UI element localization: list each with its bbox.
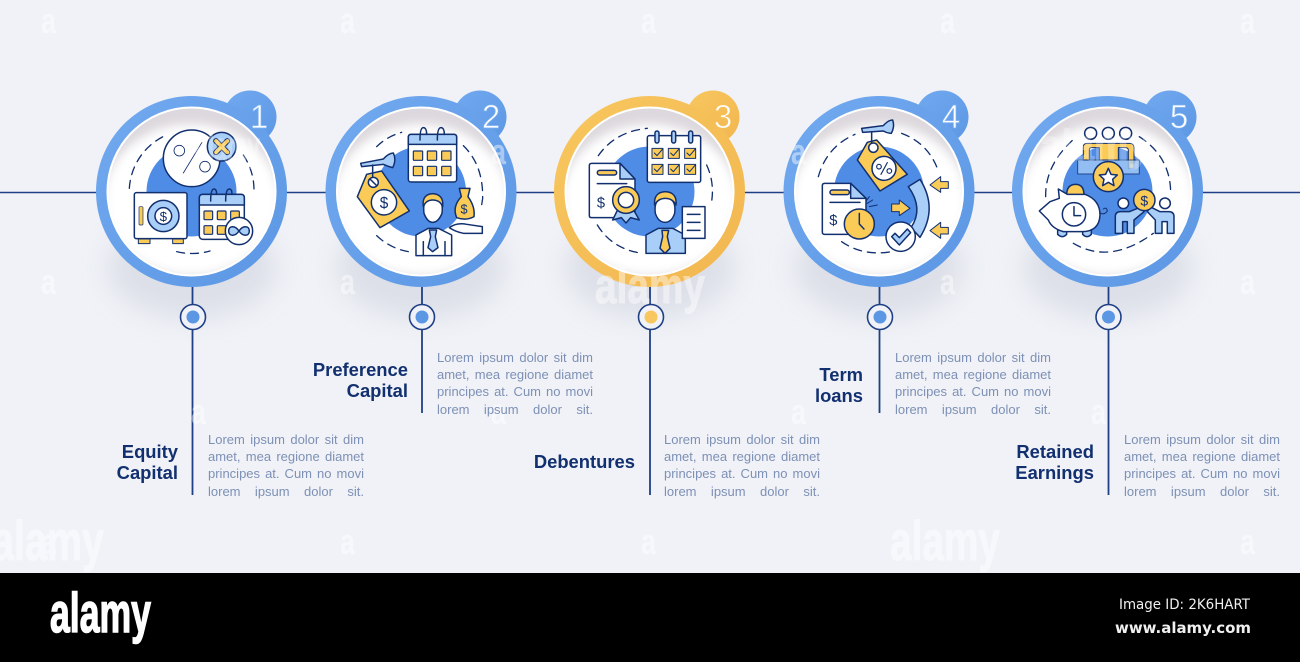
number 5: 5	[1170, 98, 1188, 135]
watermark overlay: a	[641, 521, 657, 562]
heading: equity capital: Equity	[122, 441, 179, 462]
number 4: 4	[942, 98, 960, 135]
heading: preference capital: Capital	[347, 380, 408, 401]
image id: Image ID: 2K6HART	[1119, 597, 1250, 613]
description 1	[208, 432, 364, 499]
watermark overlay: a	[1240, 261, 1256, 302]
heading: term loans: Term	[819, 364, 863, 385]
icon: certificate, calendar and bondholder: $	[597, 196, 605, 212]
icon: price tag, calendar and investor	[357, 128, 483, 256]
description 4: amet, mea regione diamet	[895, 367, 1051, 382]
watermark overlay: alamy	[890, 509, 1000, 572]
description 2	[437, 350, 593, 417]
connector and node 5	[1096, 287, 1121, 495]
circle frame 5	[1012, 90, 1203, 318]
circle frame 1	[96, 90, 287, 318]
description 4: lorem ipsum dolor sit.	[895, 402, 1051, 417]
watermark overlay: a	[340, 0, 356, 41]
description 2: principes at. Cum no movi	[437, 384, 593, 399]
footer logo: alamy	[50, 581, 151, 644]
connector and node 3	[638, 287, 664, 495]
icon: loan terms, clock and approval	[818, 120, 948, 253]
description 1: lorem ipsum dolor sit.	[208, 484, 364, 499]
description 3: lorem ipsum dolor sit.	[664, 484, 820, 499]
horizontal timeline line	[0, 192, 1300, 194]
watermark overlay: alamy	[195, 125, 260, 169]
icon: board, piggy bank and shared profit: $	[1140, 192, 1148, 208]
description 2: Lorem ipsum dolor sit dim	[437, 350, 593, 365]
icon: price tag, calendar and investor: $	[380, 195, 389, 212]
step 1: equity capital	[96, 90, 287, 495]
footer band	[0, 573, 1300, 662]
number 1: 1	[250, 98, 268, 135]
watermark overlay: a	[340, 261, 356, 302]
watermark overlay: a	[41, 0, 57, 41]
icon: interest, safe and calendar	[129, 130, 254, 253]
heading: equity capital: Capital	[117, 462, 178, 483]
circle frame 2	[326, 90, 516, 318]
watermark overlay: a	[1240, 0, 1256, 41]
step 3: debentures	[534, 90, 745, 495]
heading: retained earnings: Earnings	[1015, 462, 1094, 483]
watermark overlay: a	[940, 0, 956, 41]
description 5: lorem ipsum dolor sit.	[1124, 484, 1280, 499]
description 3: Lorem ipsum dolor sit dim	[664, 432, 820, 447]
number 2: 2	[482, 98, 500, 135]
icon: price tag, calendar and investor: $	[460, 203, 468, 217]
description 3: amet, mea regione diamet	[664, 449, 820, 464]
watermark overlay: a	[791, 391, 807, 432]
watermark overlay: a	[1091, 391, 1107, 432]
icon: interest, safe and calendar: $	[160, 209, 168, 224]
watermark overlay: a	[491, 391, 507, 432]
watermark overlay: a	[340, 521, 356, 562]
description 2: lorem ipsum dolor sit.	[437, 402, 593, 417]
icon: loan terms, clock and approval: $	[829, 213, 837, 229]
step 5: retained earnings	[1012, 90, 1203, 495]
heading: preference capital: Preference	[313, 359, 408, 380]
circle frame 4	[784, 90, 974, 318]
watermark overlay: a	[41, 261, 57, 302]
step 2: preference capital	[313, 90, 516, 413]
description 1: principes at. Cum no movi	[208, 466, 364, 481]
description 4: principes at. Cum no movi	[895, 384, 1051, 399]
description 1: Lorem ipsum dolor sit dim	[208, 432, 364, 447]
step 4: term loans	[784, 90, 974, 413]
watermark overlay: a	[940, 261, 956, 302]
description 5: Lorem ipsum dolor sit dim	[1124, 432, 1280, 447]
heading: debentures: Debentures	[534, 451, 635, 472]
description 2: amet, mea regione diamet	[437, 367, 593, 382]
watermark overlay: a	[191, 391, 207, 432]
description 4: Lorem ipsum dolor sit dim	[895, 350, 1051, 365]
description 5: amet, mea regione diamet	[1124, 449, 1280, 464]
connector and node 2	[410, 287, 434, 413]
watermark overlay: a	[41, 521, 57, 562]
watermark overlay: alamy	[595, 258, 705, 314]
description 5	[1124, 432, 1280, 499]
icon: certificate, calendar and bondholder	[589, 128, 712, 253]
heading: term loans: loans	[815, 385, 863, 406]
watermark overlay: a	[1240, 521, 1256, 562]
circle frame 3	[554, 90, 745, 318]
description 5: principes at. Cum no movi	[1124, 466, 1280, 481]
watermark overlay: a	[641, 0, 657, 41]
description 3	[664, 432, 820, 499]
watermark overlay: a	[791, 131, 807, 172]
number 3: 3	[714, 98, 732, 135]
watermark overlay: alamy	[1040, 121, 1150, 170]
description 3: principes at. Cum no movi	[664, 466, 820, 481]
heading: retained earnings: Retained	[1016, 441, 1094, 462]
description 1: amet, mea regione diamet	[208, 449, 364, 464]
connector and node 4	[868, 287, 892, 413]
connector and node 1	[180, 287, 206, 495]
description 4	[895, 350, 1051, 417]
watermark overlay: a	[491, 131, 507, 172]
icon: board, piggy bank and shared profit	[1039, 127, 1174, 252]
website: www.alamy.com	[1115, 619, 1251, 637]
